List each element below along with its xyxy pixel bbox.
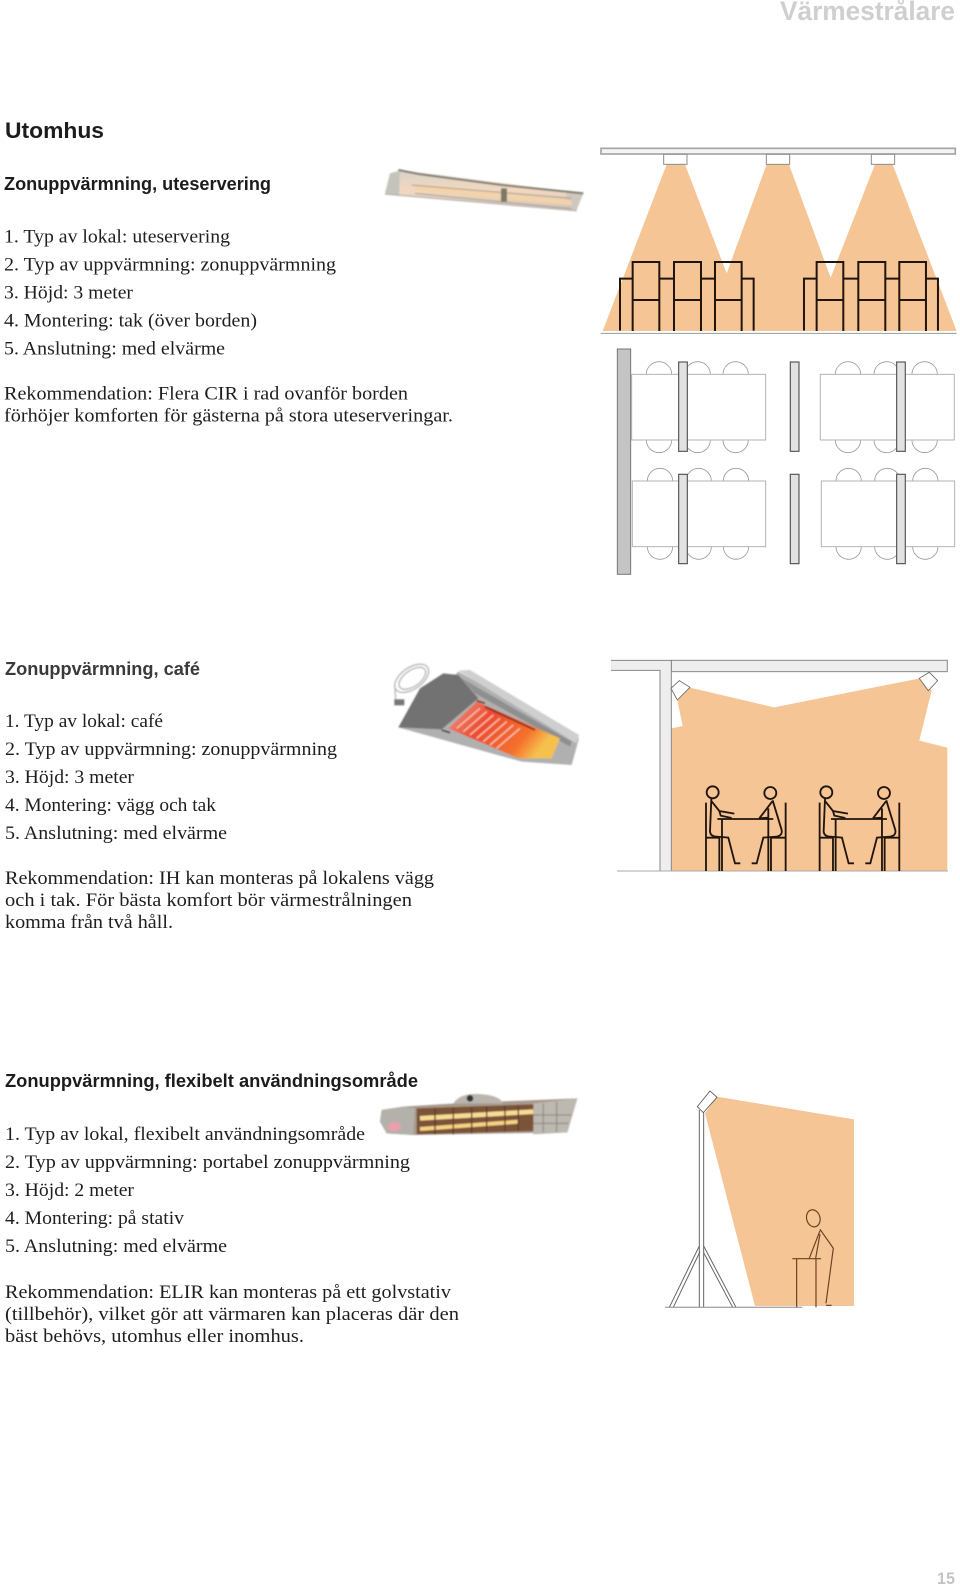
diagram: ceiling heaters floor plan <box>617 349 955 574</box>
ceiling bar <box>601 148 955 154</box>
photo: CIR heater <box>385 170 583 211</box>
chairs <box>646 362 938 559</box>
heading: café: Zonuppvärmning, café <box>5 659 200 679</box>
recommendation: uteservering: förhöjer komforten för gästerna på stora uteserveringar. <box>4 406 453 426</box>
heading: uteservering: Zonuppvärmning, uteservering <box>4 174 271 194</box>
numbered list: flexibelt: 4. Montering: på stativ <box>5 1209 185 1229</box>
recommendation: uteservering: Rekommendation: Flera CIR i rad ovanför borden <box>4 384 408 404</box>
numbered list: café: 3. Höjd: 3 meter <box>5 768 134 788</box>
recommendation: flexibelt <box>5 1283 459 1347</box>
numbered list: flexibelt: 3. Höjd: 2 meter <box>5 1181 134 1201</box>
diagram: ceiling heaters side view <box>601 148 957 333</box>
floor line <box>617 869 948 872</box>
heat area <box>671 678 947 871</box>
numbered list: uteservering: 4. Montering: tak (över borden) <box>4 312 257 332</box>
recommendation: café: och i tak. För bästa komfort bör värmestrålningen <box>5 891 412 911</box>
people at tables <box>706 786 899 871</box>
diagram: café wall and ceiling heaters <box>611 660 948 871</box>
heaters <box>679 362 905 564</box>
numbered list: café: 1. Typ av lokal: café <box>5 712 163 732</box>
numbered list: uteservering: 2. Typ av uppvärmning: zonuppvärmning <box>4 256 336 276</box>
tripod stand <box>669 1110 736 1307</box>
tables <box>632 374 955 547</box>
numbered list: flexibelt <box>5 1125 410 1257</box>
heater <box>697 1091 717 1113</box>
wall <box>617 349 631 574</box>
wall and ceiling <box>611 660 947 871</box>
cord <box>390 659 434 700</box>
numbered list: café: 2. Typ av uppvärmning: zonuppvärmning <box>5 740 337 760</box>
numbered list: flexibelt: 5. Anslutning: med elvärme <box>5 1237 227 1257</box>
recommendation: uteservering <box>4 384 453 426</box>
numbered list: flexibelt: 1. Typ av lokal, flexibelt användningsområde <box>5 1125 365 1145</box>
heat cones <box>603 164 957 331</box>
numbered list: uteservering: 3. Höjd: 3 meter <box>4 284 133 304</box>
numbered list: uteservering <box>4 228 336 360</box>
numbered list: uteservering: 5. Anslutning: med elvärme <box>4 340 225 360</box>
recommendation: flexibelt: Rekommendation: ELIR kan monteras på ett golvstativ <box>5 1283 452 1303</box>
recommendation: café <box>5 869 434 933</box>
recommendation: café: Rekommendation: IH kan monteras på lokalens vägg <box>5 869 434 889</box>
recommendation: flexibelt: bäst behövs, utomhus eller inomhus. <box>5 1327 304 1347</box>
floor line <box>601 332 957 335</box>
heater fixtures <box>664 154 895 164</box>
heading: flexibelt: Zonuppvärmning, flexibelt användningsområde <box>5 1071 418 1091</box>
floor line <box>665 1306 802 1309</box>
recommendation: flexibelt: (tillbehör), vilket gör att värmaren kan placeras där den <box>5 1305 459 1325</box>
recommendation: café: komma från två håll. <box>5 913 173 933</box>
numbered list: flexibelt: 2. Typ av uppvärmning: portabel zonuppvärmning <box>5 1153 410 1173</box>
tables and chairs <box>620 262 938 331</box>
photo: ELIR heater <box>380 1094 577 1135</box>
diagram: heater on floor stand <box>665 1091 854 1307</box>
numbered list: café: 4. Montering: vägg och tak <box>5 796 217 816</box>
panel: uteservering text <box>4 174 453 426</box>
panel: flexibelt text <box>5 1071 459 1347</box>
numbered list: café <box>5 712 337 844</box>
numbered list: café: 5. Anslutning: med elvärme <box>5 824 227 844</box>
photo: IH heater <box>390 659 579 765</box>
person at standing table <box>792 1208 833 1307</box>
section heading: Utomhus: Utomhus <box>5 118 104 143</box>
numbered list: uteservering: 1. Typ av lokal: uteservering <box>4 228 230 248</box>
heaters <box>671 672 938 700</box>
panel: café text <box>5 659 434 933</box>
heat area <box>705 1097 854 1306</box>
